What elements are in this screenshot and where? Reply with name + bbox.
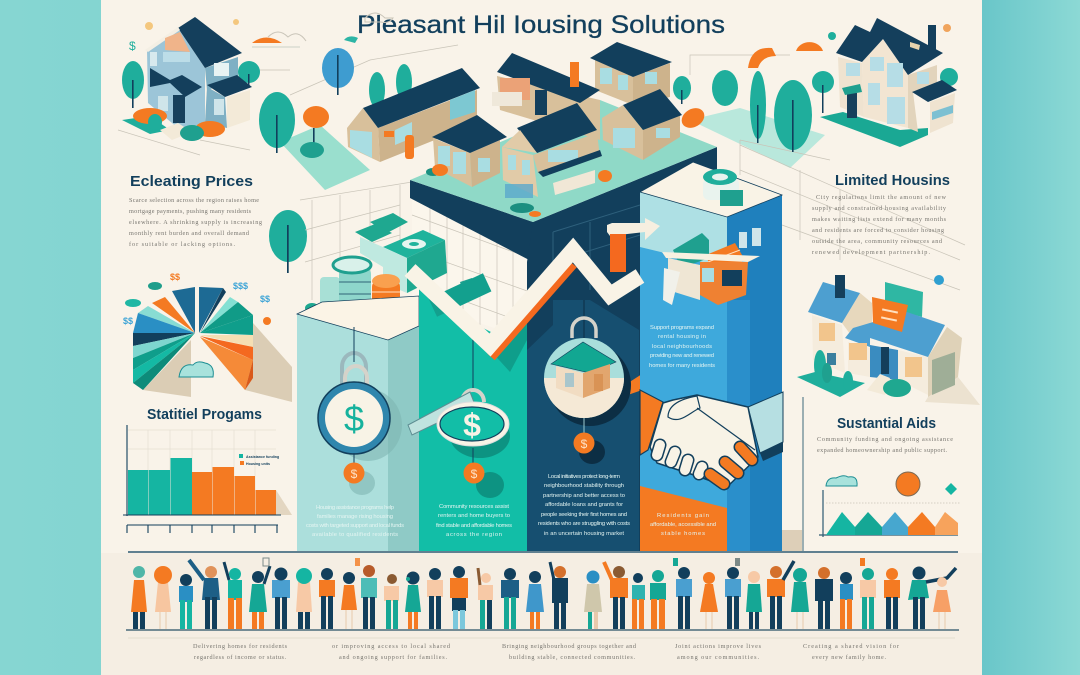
body text: expanded homeownership and public support. bbox=[817, 447, 947, 454]
body text: renewed development partnership. bbox=[812, 249, 930, 256]
caption 1: Delivering homes for residents bbox=[193, 643, 288, 650]
key bbox=[408, 390, 510, 458]
orange panel text bbox=[650, 513, 716, 537]
right house illustration bbox=[797, 275, 980, 405]
caption 4 bbox=[675, 643, 762, 661]
left text block: escalating prices bbox=[129, 173, 262, 248]
tower miniature house and money bbox=[662, 233, 760, 305]
column 1 text: families manage rising housing bbox=[317, 514, 393, 520]
caption 2: or improving access to local shared bbox=[332, 643, 451, 650]
ground patches and thin scenery bbox=[118, 13, 960, 260]
heading: Ecleating Prices bbox=[130, 173, 253, 190]
body text: makes waiting lists extend for many months bbox=[812, 216, 947, 223]
heading: Limited Housins bbox=[835, 172, 950, 189]
caption 3: Bringing neighbourhood groups together and bbox=[502, 643, 637, 650]
column 1 text bbox=[306, 505, 404, 538]
column 2 text bbox=[436, 504, 512, 538]
house: center large bbox=[502, 103, 602, 197]
top-left house bbox=[122, 17, 252, 141]
column 3 text: affordable loans and grants for bbox=[545, 502, 623, 508]
padlock dial with dollar: $ bbox=[344, 398, 364, 439]
body text: Scarce selection across the region raises home bbox=[129, 197, 259, 204]
coin bbox=[344, 453, 375, 495]
pie labels: $$$ bbox=[233, 281, 248, 291]
top-right house bbox=[820, 18, 957, 147]
cloud bbox=[179, 362, 213, 377]
column 4 text bbox=[649, 325, 715, 369]
body text: Community funding and ongoing assistance bbox=[817, 436, 953, 443]
bar chart bbox=[123, 425, 292, 533]
padlock dial with dollar bbox=[318, 382, 402, 461]
house: right bbox=[602, 89, 682, 160]
column 3 text: in an uncertain housing market bbox=[544, 531, 624, 537]
ground patches and thin scenery: $ bbox=[129, 39, 136, 53]
house: long left bbox=[347, 68, 480, 162]
house cluster bbox=[347, 42, 682, 217]
caption 2 bbox=[332, 643, 451, 661]
body text: for suitable or lacking options. bbox=[129, 241, 235, 248]
column 4 text: rental housing in bbox=[658, 334, 706, 340]
column 1 text: Housing assistance programs help bbox=[316, 505, 394, 511]
coin bbox=[574, 418, 605, 464]
pie chart bbox=[123, 272, 292, 402]
caption 4: among our communities. bbox=[677, 654, 759, 661]
stack on tower roof bbox=[703, 169, 743, 206]
left heading: programs: Statitiel Progams bbox=[147, 406, 262, 423]
bottom captions bbox=[128, 638, 955, 661]
mini area chart bbox=[819, 472, 960, 537]
coin stack teal bbox=[305, 257, 371, 320]
trees scattered bbox=[122, 48, 958, 273]
orange panel text: Residents gain bbox=[657, 513, 709, 519]
coin stack orange bbox=[372, 274, 400, 320]
column 3 text: residents who are struggling with costs bbox=[538, 521, 630, 527]
column 3 text: people seeking their first homes and bbox=[541, 512, 627, 518]
caption 5: every new family home. bbox=[812, 654, 886, 661]
zigzag trend arrow bbox=[410, 250, 640, 357]
coin: $ bbox=[351, 467, 358, 481]
legend bbox=[239, 454, 279, 466]
column 3 text: partnership and better access to bbox=[543, 493, 625, 499]
small arrow bbox=[607, 218, 660, 272]
body text: City regulations limit the amount of new bbox=[816, 194, 947, 201]
column 4 text: local neighbourhoods bbox=[652, 344, 712, 350]
key: $ bbox=[463, 407, 481, 443]
house: back center bbox=[492, 53, 600, 140]
column 2 text: across the region bbox=[446, 532, 502, 538]
body text: and residents are forced to consider housing bbox=[812, 227, 944, 234]
coin bbox=[464, 448, 504, 498]
column 2 text: Community resources assist bbox=[439, 504, 509, 510]
padlock shackles bbox=[342, 327, 367, 390]
title: Pleasant Hil Iousing Solutions bbox=[357, 11, 725, 39]
caption 2: and ongoing support for families. bbox=[339, 654, 447, 661]
tower small windows bbox=[739, 228, 761, 248]
column 2 text: renters and home buyers to bbox=[438, 513, 510, 519]
lower paper tone bbox=[101, 553, 982, 675]
small icons above crowd bbox=[263, 558, 865, 581]
body text bbox=[129, 197, 262, 248]
caption 3 bbox=[502, 643, 637, 661]
column 3: house in circle bbox=[527, 300, 642, 551]
central navy block with green roof bbox=[410, 100, 717, 551]
column 4 text: providing new and renewed bbox=[650, 353, 714, 359]
body text: outside the area, community resources and bbox=[812, 238, 943, 245]
orange panel text: stable homes bbox=[661, 531, 705, 537]
caption 5: Creating a shared vision for bbox=[803, 643, 899, 650]
column 3 text: neighbourhood stability through bbox=[544, 483, 624, 489]
body text: supply and constrained housing availability bbox=[812, 205, 947, 212]
caption 3: building stable, connected communities. bbox=[509, 654, 635, 661]
grid wall bbox=[300, 140, 965, 551]
column 1 text: available to qualified residents bbox=[312, 532, 398, 538]
column 3 text: Local initiatives protect long-term bbox=[548, 474, 620, 480]
legend: Assistance funding bbox=[246, 455, 279, 459]
crowd of people bbox=[126, 552, 959, 630]
legend: Housing units bbox=[246, 462, 270, 466]
caption 1 bbox=[193, 643, 288, 661]
column 2: key and tag bbox=[408, 270, 527, 551]
column 2 text: find stable and affordable homes bbox=[436, 523, 512, 529]
caption 5 bbox=[803, 643, 899, 661]
house: back right bbox=[590, 42, 672, 105]
heading: Sustantial Aids bbox=[837, 415, 936, 432]
pie labels: $$ bbox=[123, 316, 133, 326]
column 1 text: costs with targeted support and local funds bbox=[306, 523, 404, 529]
pie labels bbox=[123, 272, 270, 326]
body text bbox=[812, 194, 947, 256]
column 3 text bbox=[538, 474, 630, 537]
money stacks bbox=[305, 213, 477, 320]
right text block: substantial aids bbox=[817, 415, 953, 454]
body text: monthly rent burden and overall demand bbox=[129, 230, 250, 237]
column 4: blue tower bbox=[607, 162, 802, 551]
caption 1: regardless of income or status. bbox=[194, 654, 286, 661]
caption 4: Joint actions improve lives bbox=[675, 643, 762, 650]
body text: mortgage payments, pushing many residents bbox=[129, 208, 252, 215]
circle house bbox=[544, 338, 642, 426]
small shapes near pie bbox=[125, 282, 271, 325]
column 1: padlock bbox=[297, 296, 419, 551]
orange panel text: affordable, accessible and bbox=[650, 522, 716, 528]
body text bbox=[817, 436, 953, 454]
right text block: limited housing bbox=[812, 172, 950, 256]
pie labels: $$ bbox=[170, 272, 180, 282]
column 4 text: Support programs expand bbox=[650, 325, 714, 331]
house: front left bbox=[432, 115, 507, 187]
column 4 text: homes for many residents bbox=[649, 363, 715, 369]
coin: $ bbox=[471, 467, 478, 481]
pie labels: $$ bbox=[260, 294, 270, 304]
body text: elsewhere. A shrinking supply is increasing bbox=[129, 219, 262, 226]
handshake bbox=[640, 390, 783, 487]
coin: $ bbox=[581, 437, 588, 451]
